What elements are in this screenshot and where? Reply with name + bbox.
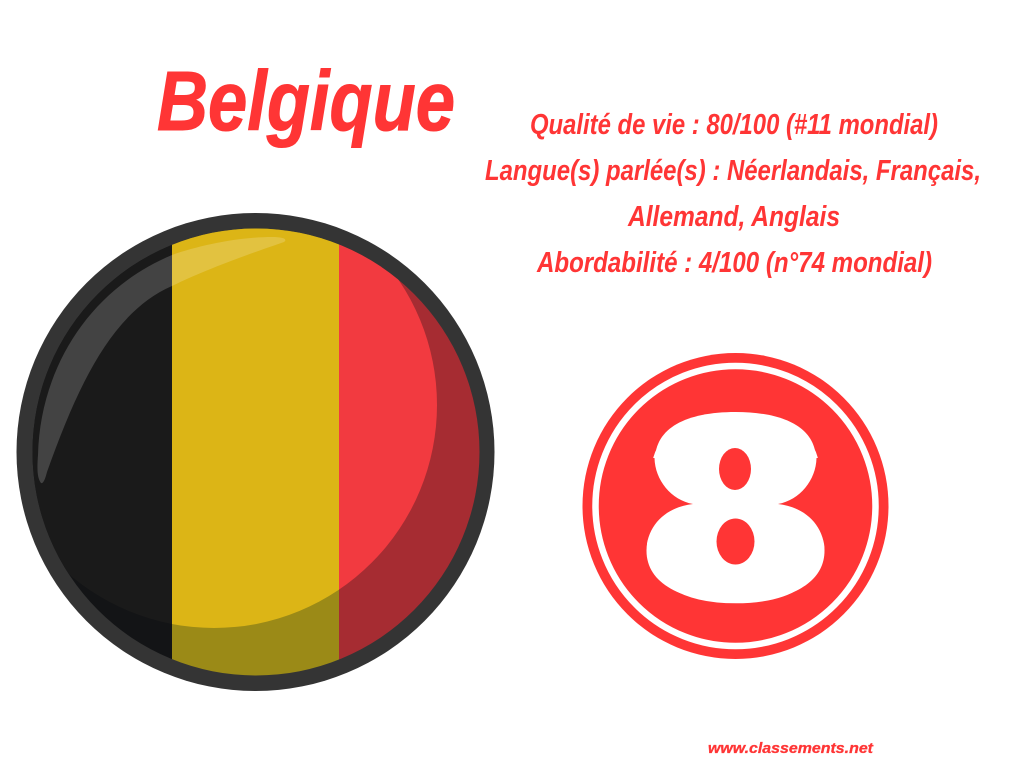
text block: country facts: Qualité de vie : 80/100 (#11 mondial) bbox=[530, 109, 938, 141]
text block: country facts: Allemand, Anglais bbox=[627, 201, 840, 233]
icon: Belgian flag button bbox=[16, 213, 499, 691]
text block: country facts bbox=[485, 109, 981, 279]
title: Belgique bbox=[157, 54, 455, 148]
text block: country facts: Abordabilité : 4/100 (n°74 mondial) bbox=[536, 247, 932, 279]
badge: rank 8: 8 bbox=[650, 377, 821, 641]
badge: rank 8 bbox=[582, 353, 888, 659]
footer: website: www.classements.net bbox=[708, 741, 874, 757]
